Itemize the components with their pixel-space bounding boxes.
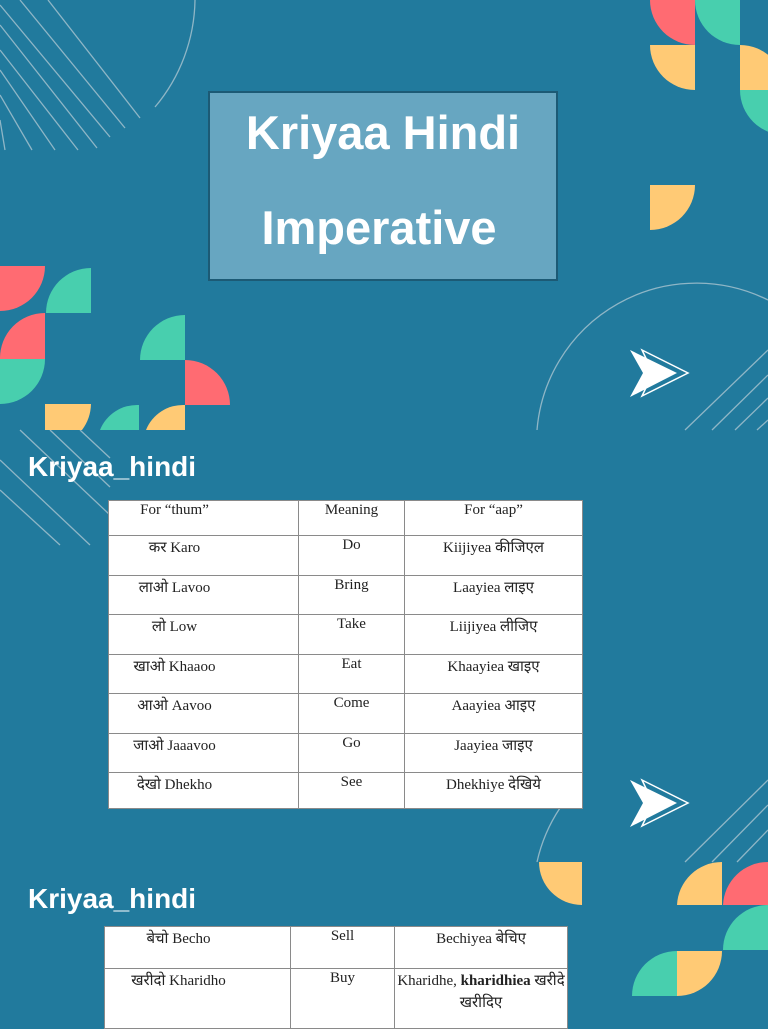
table 1: Come [334, 695, 369, 711]
table 1: आओ Aavoo [137, 698, 212, 714]
table 1: Khaayiea खाइए [447, 659, 540, 675]
title box [208, 91, 558, 281]
table 1: Do [342, 537, 361, 553]
table 1: लाओ Lavoo [139, 580, 210, 596]
icon: arrow 2 [630, 778, 690, 828]
table 2: Sell [331, 928, 354, 944]
table 1: For “thum” [140, 502, 209, 518]
table 2: खरीदो Kharidho [131, 973, 226, 989]
table 2: बेचो Becho [146, 931, 211, 947]
table 1: Aaayiea आइए [452, 698, 535, 714]
table 1: For “aap” [464, 502, 523, 518]
title box: Imperative [261, 201, 497, 254]
table 1: Jaayiea जाइए [454, 738, 533, 754]
table 1: Liijiyea लीजिए [450, 619, 537, 635]
table 1 [108, 500, 583, 809]
table 1: Take [337, 616, 366, 632]
table 2 [104, 926, 568, 1029]
table 1: देखो Dhekho [137, 777, 212, 793]
icon: arrow 1 [630, 348, 690, 398]
table 1: लो Low [152, 619, 197, 635]
table 2: Bechiyea बेचिए [436, 931, 526, 947]
table 1: Kiijiyea कीजिएल [443, 540, 544, 556]
heading: section 2: Kriyaa_hindi [28, 883, 196, 914]
table 2: Kharidhe, kharidhiea खरीदे खरीदिए [397, 973, 565, 1011]
table 1: Eat [342, 656, 362, 672]
table 1: Laayiea लाइए [453, 580, 534, 596]
table 1: जाओ Jaaavoo [133, 738, 216, 754]
table 1: Meaning [325, 502, 378, 518]
table 1: Bring [334, 577, 369, 593]
table 1: Go [342, 735, 361, 751]
table 1: खाओ Khaaoo [134, 659, 215, 675]
table 1: See [341, 774, 362, 790]
table 1: Dhekhiye देखिये [446, 777, 541, 793]
title box: Kriyaa Hindi [246, 106, 520, 159]
table 1: कर Karo [149, 540, 200, 556]
heading: section 1: Kriyaa_hindi [28, 451, 196, 482]
table 2: Buy [330, 970, 355, 986]
